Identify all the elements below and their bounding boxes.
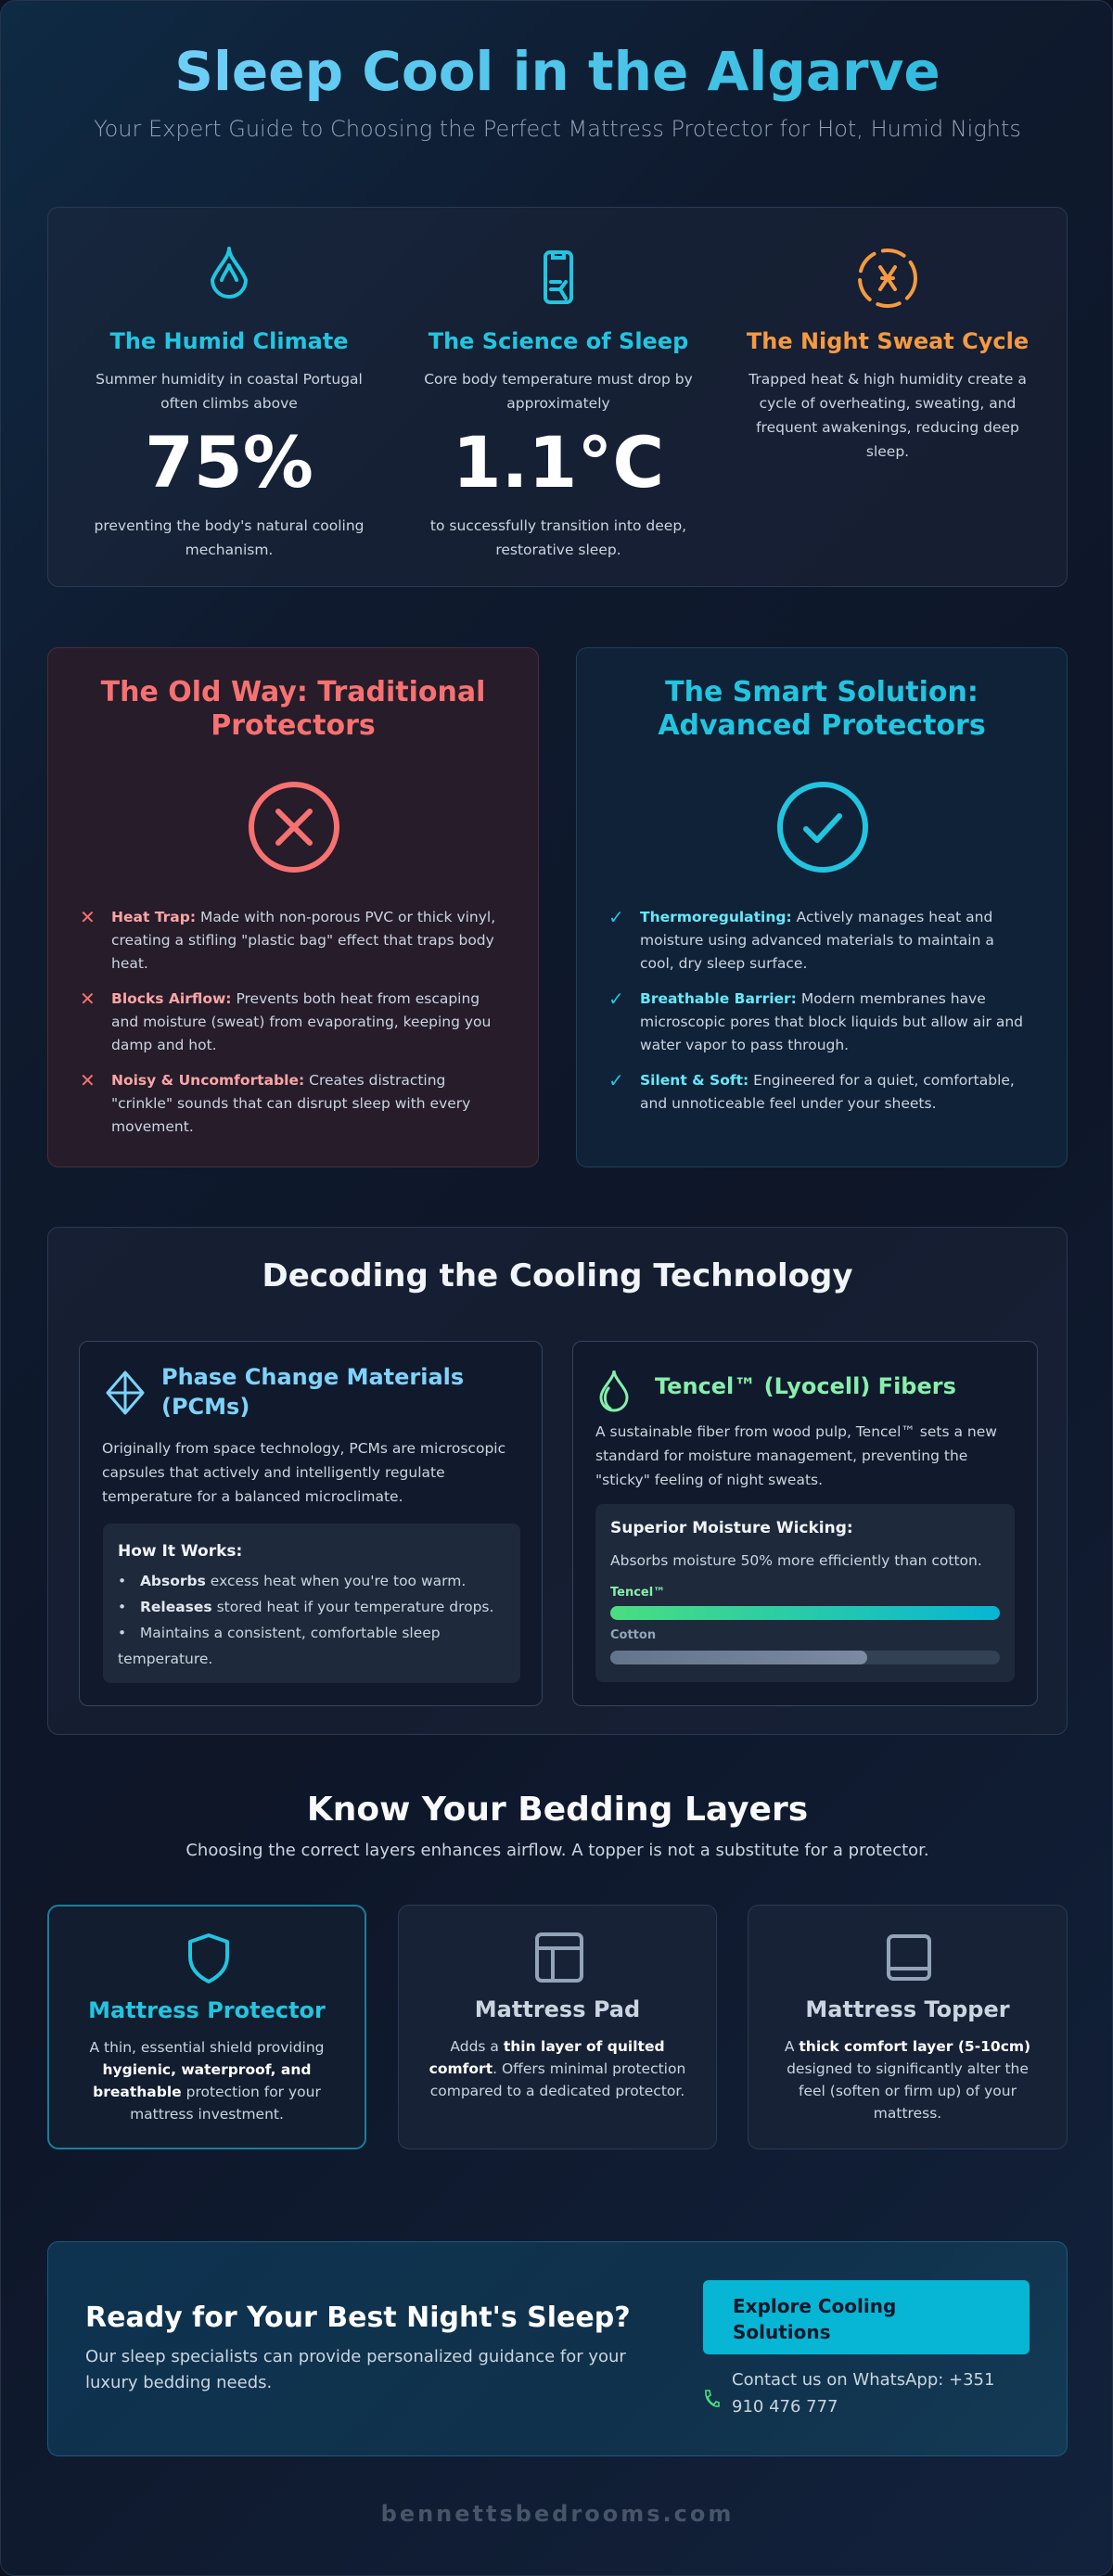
- icon: check circle: [777, 782, 868, 873]
- bar: tencel: Tencel™: [610, 1586, 665, 1600]
- list item: silent: Silent & Soft: Engineered for a quiet, comfortable, and unnoticeable feel under your sheets.: [640, 1072, 1015, 1112]
- icon: water drop: [211, 247, 248, 299]
- card: mattress topper: Mattress Topper: [805, 1996, 1010, 2022]
- text: Trapped heat & high humidity create a cycle of overheating, sweating, and frequent awakenings, reducing deep sleep.: [748, 371, 1027, 460]
- heading: Decoding the Cooling Technology: [262, 1257, 853, 1294]
- card: mattress topper: [748, 1905, 1068, 2149]
- moisture wicking box with bar chart: Superior Moisture Wicking:: [610, 1519, 853, 1537]
- card: PCMs: [79, 1341, 543, 1706]
- card: mattress pad: Adds a thin layer of quilted comfort. Offers minimal protection compared to a dedicated protector.: [429, 2038, 685, 2099]
- stat: science of sleep: [424, 250, 693, 558]
- list item: thermoregulating: Thermoregulating: Actively manages heat and moisture using advanced materials to maintain a cool, dry sleep surface.: [640, 909, 994, 972]
- stat: humid climate: mechanism.: [186, 542, 273, 558]
- stat: science of sleep: to successfully transition into deep,: [430, 517, 686, 534]
- panel: smart solution: ✓: [608, 906, 624, 928]
- stat: science of sleep: restorative sleep.: [495, 542, 621, 558]
- text: [424, 371, 693, 412]
- card: mattress topper: A thick comfort layer (5-10cm) designed to significantly alter the feel (soften or firm up) of your mattress.: [785, 2038, 1030, 2122]
- icon: diamond: [106, 1371, 145, 1415]
- text: Core body temperature must drop by: [424, 371, 693, 388]
- heading: The Humid Climate: [109, 328, 349, 354]
- title: (PCMs): [161, 1394, 249, 1420]
- subtitle: bedding layers: Choosing the correct layers enhances airflow. A topper is not a substitute for a protector.: [186, 1841, 929, 1860]
- heading: The Smart Solution: Advanced Protectors: [658, 676, 986, 742]
- bar: cotton: Cotton: [610, 1628, 656, 1642]
- panel: smart solution: ✓: [608, 1069, 624, 1091]
- card: mattress protector: A thin, essential shield providing hygienic, waterproof, and breathable protection for your mattress investment.: [89, 2039, 325, 2123]
- panel: old way: ✕: [80, 906, 96, 928]
- panel: smart solution: ✓: [608, 988, 624, 1010]
- card: mattress pad: [398, 1905, 717, 2149]
- title: Phase Change Materials: [161, 1364, 464, 1390]
- button: [703, 2280, 1030, 2354]
- panel: smart solution: [576, 647, 1068, 1167]
- panel: old way: ✕: [80, 1069, 96, 1091]
- list item: blocks airflow: Blocks Airflow: Prevents both heat from escaping and moisture (sweat) from evaporating, keeping you damp and hot.: [111, 990, 491, 1053]
- cta text: Our sleep specialists can provide personalized guidance for your luxury bedding needs.: [85, 2347, 626, 2392]
- how it works box: • Maintains a consistent, comfortable sleep temperature.: [118, 1625, 441, 1667]
- text: approximately: [506, 395, 610, 412]
- moisture wicking box with bar chart: Absorbs moisture 50% more efficiently than cotton.: [610, 1552, 982, 1569]
- text: A sustainable fiber from wood pulp, Tencel™ sets a new standard for moisture management, preventing the "sticky" feeling of night sweats.: [595, 1423, 997, 1488]
- footer: bennettsbedrooms.com: [381, 2501, 734, 2527]
- title: Tencel™ (Lyocell) Fibers: [655, 1373, 956, 1399]
- title: Sleep Cool in the Algarve: [174, 40, 940, 103]
- whatsapp contact: Contact us on WhatsApp: +351 910 476 777: [732, 2370, 994, 2417]
- number: 75%: [145, 421, 313, 504]
- list item: breathable: Breathable Barrier: Modern membranes have microscopic pores that block liquids but allow air and water vapor to pass through.: [640, 990, 1023, 1053]
- panel: old way: ✕: [80, 988, 96, 1010]
- subtitle: Your Expert Guide to Choosing the Perfect Mattress Protector for Hot, Humid Nights: [94, 116, 1021, 142]
- icon: leaf drop: [599, 1371, 629, 1411]
- icon: pad: [535, 1932, 583, 1983]
- list item: noisy: Noisy & Uncomfortable: Creates distracting "crinkle" sounds that can disrupt sleep with every movement.: [111, 1072, 470, 1135]
- text: often climbs above: [160, 395, 298, 412]
- heading: The Old Way: Traditional Protectors: [101, 676, 485, 742]
- how it works box: • Releases stored heat if your temperature drops.: [118, 1599, 493, 1615]
- text: Summer humidity in coastal Portugal: [96, 371, 363, 388]
- card: mattress pad: Mattress Pad: [475, 1996, 640, 2022]
- panel: stats: [47, 207, 1068, 587]
- how it works box: [103, 1524, 520, 1683]
- icon: topper: [887, 1934, 931, 1981]
- panel: old way: [47, 647, 539, 1167]
- stat: humid climate: [95, 247, 364, 558]
- stat: humid climate: preventing the body's natural cooling: [95, 517, 364, 534]
- button: Explore Cooling Solutions: [733, 2295, 896, 2343]
- panel: cooling technology: [47, 1227, 1068, 1735]
- icon: cycle: [858, 249, 917, 308]
- stat: night sweat cycle: [747, 249, 1029, 460]
- heading: bedding layers: Know Your Bedding Layers: [307, 1791, 808, 1829]
- list item: heat trap: Heat Trap: Made with non-porous PVC or thick vinyl, creating a stifling "plastic bag" effect that traps body heat.: [111, 909, 495, 972]
- card: Tencel: [572, 1341, 1038, 1706]
- cta heading: Ready for Your Best Night's Sleep?: [85, 2302, 631, 2334]
- moisture wicking box with bar chart: [595, 1504, 1015, 1682]
- text: Originally from space technology, PCMs are microscopic capsules that actively and intelligently regulate temperature for a balanced microclimate.: [102, 1440, 505, 1505]
- icon: x circle: [249, 782, 339, 873]
- card: mattress protector: Mattress Protector: [88, 1997, 326, 2023]
- icon: phone: [705, 2390, 720, 2407]
- how it works box: How It Works:: [118, 1542, 242, 1561]
- icon: shield: [188, 1933, 229, 1983]
- panel: call to action: [47, 2241, 1068, 2456]
- title: [1, 40, 1113, 103]
- title: [161, 1364, 464, 1420]
- number: 1.1°C: [453, 421, 664, 504]
- heading: The Science of Sleep: [429, 328, 688, 354]
- heading: The Night Sweat Cycle: [747, 328, 1029, 354]
- how it works box: • Absorbs excess heat when you're too warm.: [118, 1573, 466, 1589]
- icon: phone: [544, 250, 573, 304]
- text: [96, 371, 363, 412]
- card: mattress protector: [47, 1905, 366, 2149]
